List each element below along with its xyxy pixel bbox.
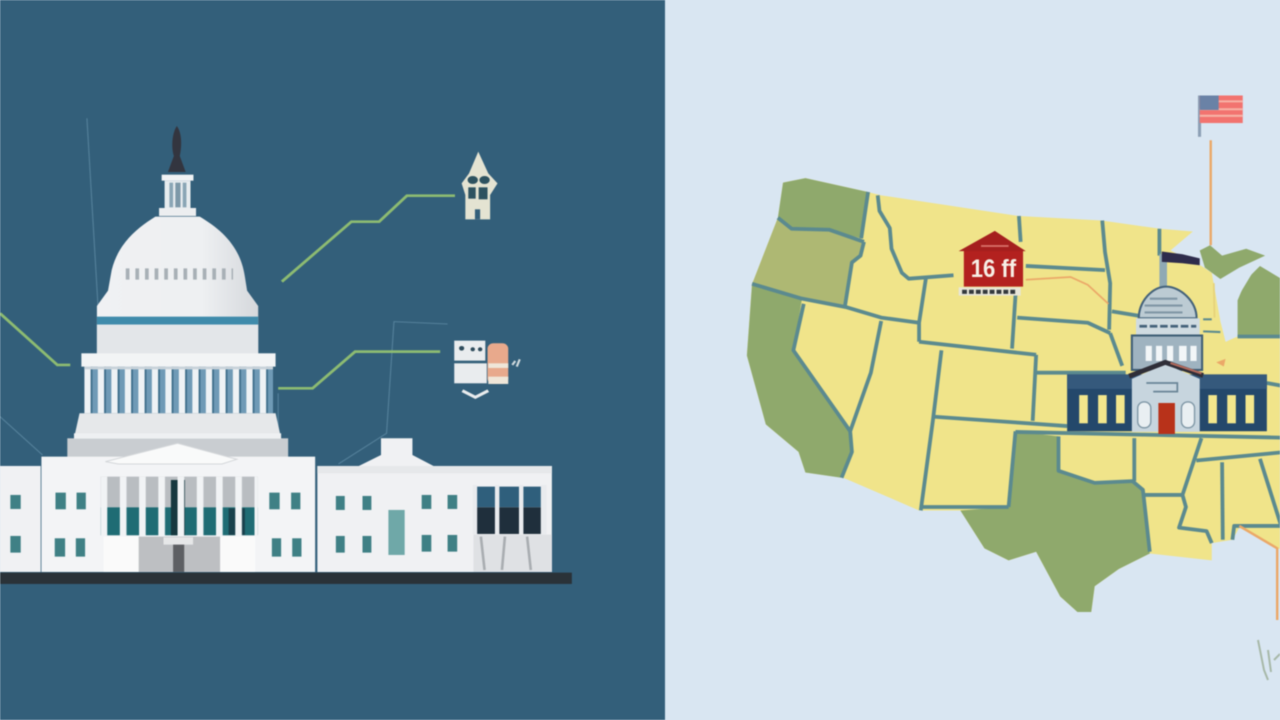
panel: capitol illustration with connectors bbox=[0, 118, 572, 584]
map: Oregon bbox=[752, 218, 864, 306]
map: Michigan lower peninsula bbox=[1238, 266, 1280, 337]
map: Michigan upper peninsula bbox=[1200, 245, 1265, 279]
capitol: dome bbox=[97, 217, 258, 355]
capitol central pavilion bbox=[1129, 362, 1203, 434]
capitol flag bbox=[1159, 251, 1200, 288]
green connector lines bbox=[0, 196, 455, 388]
capitol dome bbox=[1139, 287, 1197, 318]
building sign text: 16 ff bbox=[971, 256, 1017, 283]
icon: capitol on map bbox=[1067, 251, 1267, 434]
panel: left navy background bbox=[0, 0, 665, 720]
capitol: stepped base bbox=[67, 413, 288, 458]
capitol drum bbox=[1132, 318, 1202, 370]
capitol: right wing door bbox=[388, 510, 405, 555]
icon: red building bbox=[959, 231, 1026, 296]
icon: orange arrow marker bbox=[1216, 359, 1226, 366]
icon: American flag bbox=[1198, 95, 1243, 137]
capitol: central portico bbox=[101, 477, 258, 536]
capitol: windows bbox=[10, 493, 457, 557]
capitol: right wing bbox=[317, 438, 552, 572]
map: lake bbox=[1220, 266, 1257, 342]
capitol: colonnade bbox=[81, 353, 276, 413]
icon: obelisk monument bbox=[462, 152, 498, 219]
icon: faint sketch at lower right bbox=[1258, 640, 1280, 680]
map: Texas bbox=[960, 431, 1150, 612]
icon: office desk and person bbox=[454, 341, 520, 397]
capitol: lantern bbox=[159, 175, 196, 216]
map: state borders bbox=[752, 192, 1280, 552]
capitol: left wing bbox=[0, 466, 41, 572]
panel: right pale blue background bbox=[667, 0, 1280, 720]
capitol: pediment bbox=[105, 443, 237, 464]
faint connector lines bbox=[0, 118, 448, 464]
capitol wings bbox=[1067, 374, 1267, 431]
map: yellow land mass bbox=[747, 178, 1280, 612]
capitol: central block bbox=[41, 457, 315, 572]
map: United States bbox=[747, 95, 1280, 620]
capitol: ground bar bbox=[0, 573, 572, 584]
map: California bbox=[747, 284, 852, 478]
capitol: statue on top of dome bbox=[168, 126, 186, 172]
capitol: central stairs bbox=[104, 537, 255, 572]
orange route lines bbox=[1026, 140, 1277, 620]
capitol: right wing portico bbox=[473, 485, 552, 572]
map: Washington bbox=[778, 178, 867, 238]
